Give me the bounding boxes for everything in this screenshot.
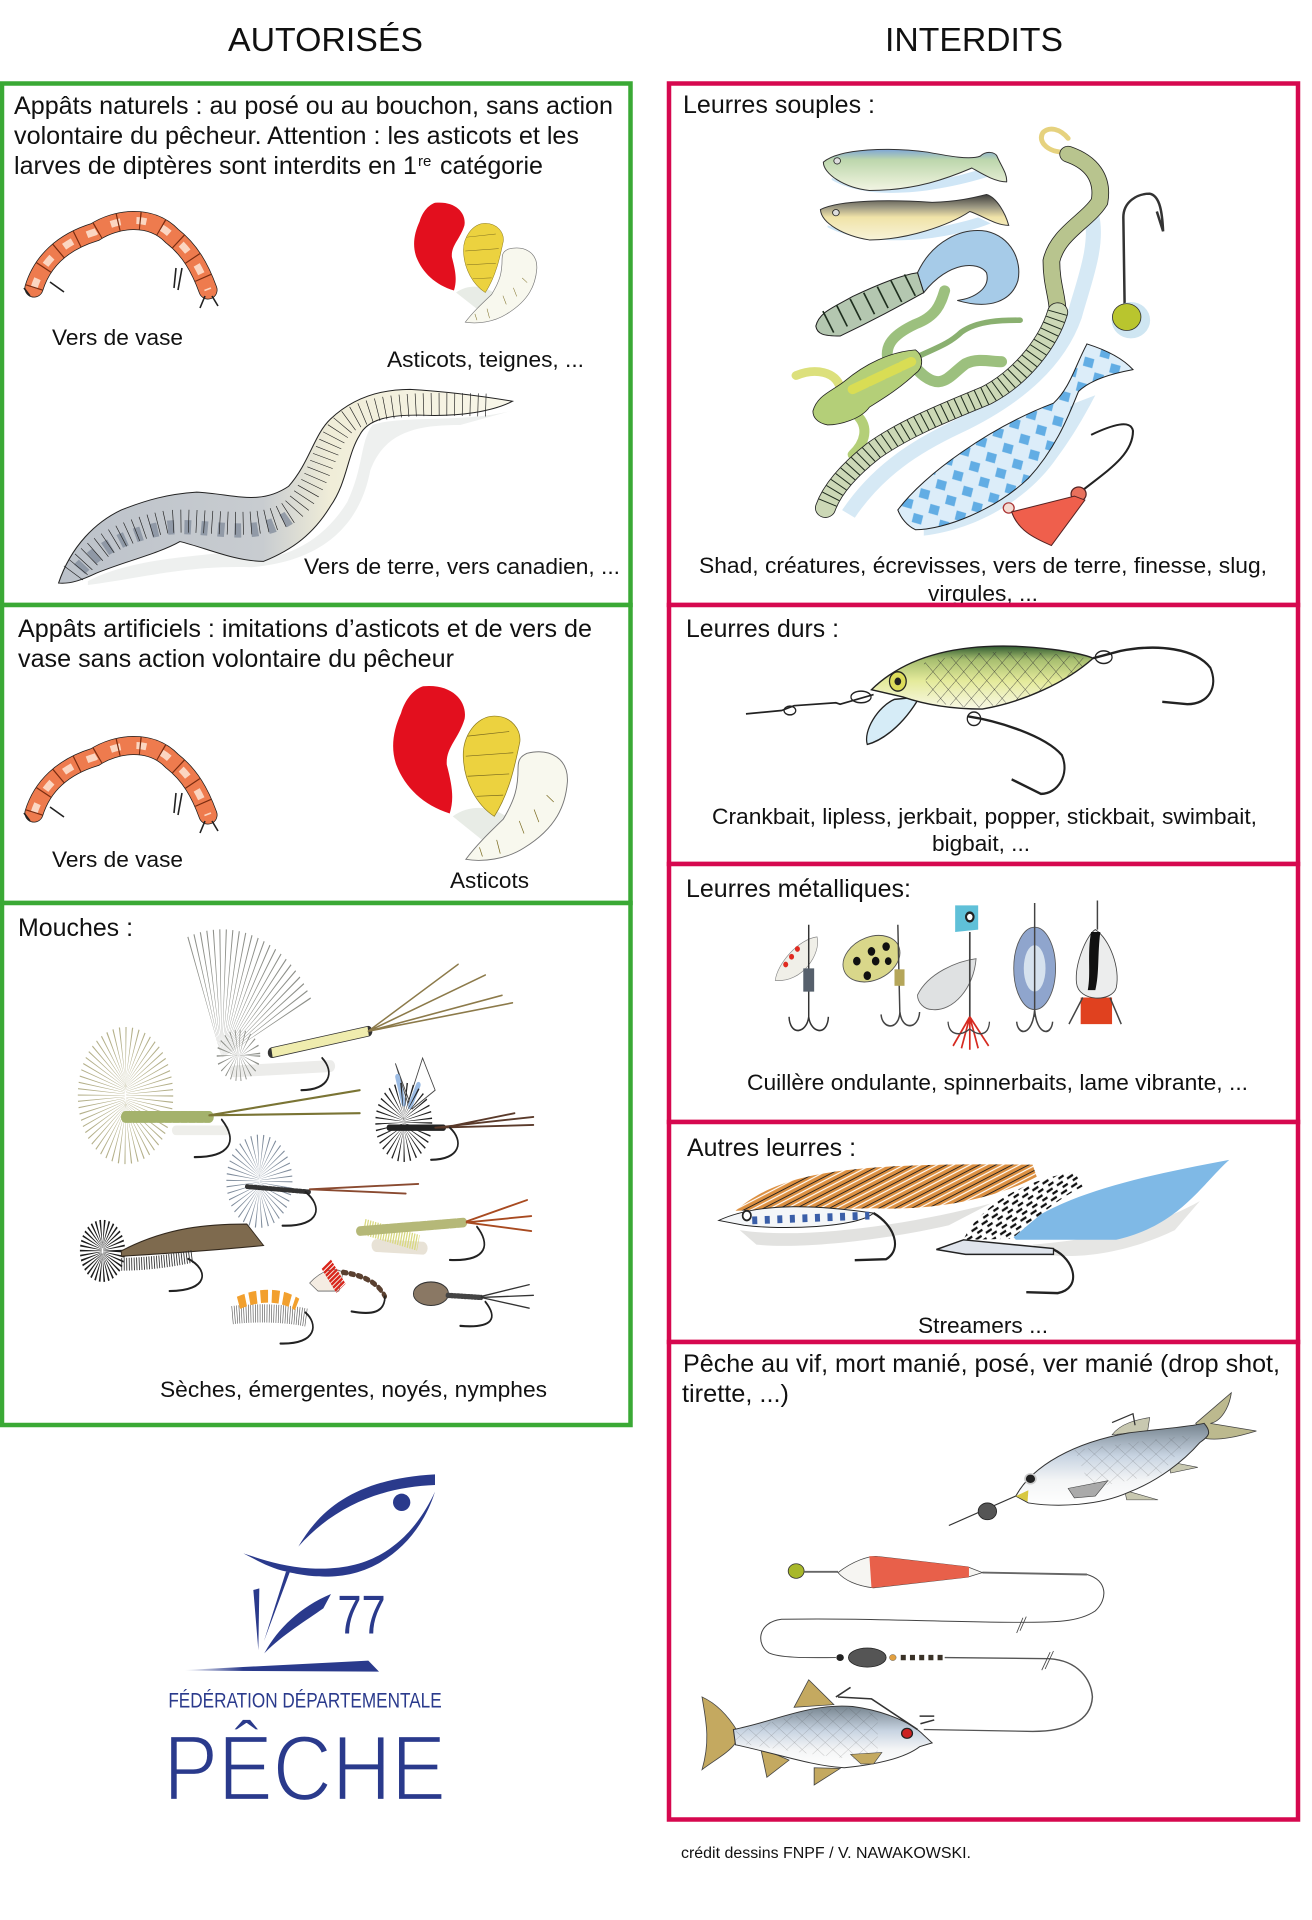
logo fish: [185, 1474, 435, 1672]
icon: ver de terre: [59, 389, 513, 585]
fly 4: [243, 1156, 418, 1226]
illustration: cuillères: [775, 901, 1121, 1050]
caption: asticots, teignes: Asticots, teignes, ...: [387, 347, 584, 372]
icon: vers de vase artificiel: [24, 745, 218, 833]
poisson souple à damier: [898, 344, 1133, 536]
heading: leurres souples: Leurres souples :: [683, 91, 875, 119]
fly 1: [205, 964, 513, 1090]
caption: mouches: Sèches, émergentes, noyés, nymphes: [160, 1377, 547, 1402]
text block: appâts naturels: catégorie: [440, 152, 543, 180]
caption: leurres durs: bigbait, ...: [932, 831, 1030, 856]
plomb et émerillons: [836, 1648, 943, 1667]
hameçon tête plombée: [1112, 194, 1163, 338]
shad jaune: [820, 194, 1009, 240]
cuillère 4: [1014, 903, 1056, 1031]
cuillère 3: [918, 905, 989, 1050]
icon: asticots: [414, 203, 537, 323]
logo text: pêche: PÊCHE: [163, 1716, 446, 1820]
panel: mouches: [2, 903, 630, 1425]
poisson mort manié: [949, 1393, 1256, 1526]
caption: leurres souples: Shad, créatures, écrevisses, vers de terre, finesse, slug,: [699, 553, 1267, 578]
logo: fédération de pêche 77: [163, 1474, 446, 1820]
caption: vers de vase: Vers de vase: [52, 847, 183, 872]
fly 3: [389, 1058, 533, 1160]
fly 7: [310, 1264, 385, 1313]
heading: mouches: Mouches :: [18, 914, 133, 942]
caption: leurres durs: [712, 804, 1257, 856]
illustration: leurres souples: [796, 129, 1163, 546]
cuillère 1: [775, 925, 828, 1030]
shad bleu: [823, 149, 1007, 193]
illustration: montages: [702, 1393, 1256, 1785]
text block: pêche au vif: Pêche au vif, mort manié, posé, ver manié (drop shot,: [683, 1350, 1280, 1378]
fly 2: [101, 1057, 360, 1157]
logo number: 77: [337, 1583, 386, 1645]
text block: appâts naturels: re: [418, 153, 431, 170]
cuillère 2: [838, 925, 920, 1026]
fly 9: [413, 1282, 533, 1326]
poisson au vif: [702, 1680, 934, 1785]
fly 8: [232, 1296, 313, 1344]
panel: leurres durs: [669, 605, 1298, 864]
ver souple: [825, 129, 1100, 514]
caption: vers de vase: Vers de vase: [52, 325, 183, 350]
illustration: poisson nageur: [746, 646, 1213, 794]
text block: appâts artificiels: [18, 615, 592, 673]
icon: vers de vase: [24, 220, 218, 308]
panel: appâts naturels: [2, 84, 630, 605]
credit: crédit dessins FNPF / V. NAWAKOWSKI.: [681, 1845, 971, 1862]
text block: appâts naturels: larves de diptères sont interdits en 1: [14, 152, 417, 180]
illustration: mouches: [91, 964, 533, 1344]
panel: autres leurres: [669, 1122, 1298, 1342]
logo text: fédération départementale: FÉDÉRATION DÉPARTEMENTALE: [168, 1688, 442, 1713]
flotteur: [788, 1556, 1087, 1588]
tête plombée rouge: [1003, 424, 1133, 546]
lézard: [796, 291, 1020, 455]
caption: leurres métalliques: Cuillère ondulante, spinnerbaits, lame vibrante, ...: [747, 1070, 1248, 1095]
text block: appâts naturels: Appâts naturels : au posé ou au bouchon, sans action: [14, 92, 613, 120]
caption: vers de terre: Vers de terre, vers canadien, ...: [304, 554, 620, 579]
heading: AUTORISÉS: AUTORISÉS: [228, 21, 423, 58]
text block: appâts artificiels: Appâts artificiels : imitations d’asticots et de vers de: [18, 615, 592, 643]
text block: pêche au vif: [682, 1350, 1280, 1408]
panel: leurres métalliques: [669, 864, 1298, 1122]
heading: INTERDITS: INTERDITS: [885, 21, 1063, 58]
streamer bleu: [936, 1160, 1229, 1293]
ligne: [761, 1574, 1104, 1731]
text block: appâts naturels: [14, 92, 613, 180]
caption: streamers: Streamers ...: [918, 1313, 1048, 1338]
streamer orange: [719, 1164, 1037, 1260]
curly tail: [816, 231, 1019, 336]
heading: leurres durs: Leurres durs :: [686, 615, 839, 643]
heading: leurres métalliques: Leurres métalliques:: [686, 875, 911, 903]
fly 6: [360, 1200, 531, 1260]
panel: appâts artificiels: [2, 605, 630, 903]
fly 5: [91, 1224, 264, 1291]
caption: leurres durs: Crankbait, lipless, jerkbait, popper, stickbait, swimbait,: [712, 804, 1257, 829]
caption: leurres souples: [699, 553, 1267, 606]
icon: asticots artificiels: [393, 686, 567, 860]
heading: autres leurres: Autres leurres :: [687, 1134, 856, 1162]
panel: leurres souples: [669, 84, 1298, 606]
text block: pêche au vif: tirette, ...): [682, 1380, 789, 1408]
text block: appâts artificiels: vase sans action volontaire du pêcheur: [18, 645, 454, 673]
illustration: streamers: [719, 1160, 1229, 1293]
cuillère 5: [1069, 901, 1121, 1024]
text block: appâts naturels: volontaire du pêcheur. Attention : les asticots et les: [14, 122, 579, 150]
panel: pêche au vif: [669, 1342, 1298, 1820]
caption: asticots: Asticots: [450, 868, 529, 893]
caption: leurres souples: virgules, ...: [928, 581, 1038, 606]
